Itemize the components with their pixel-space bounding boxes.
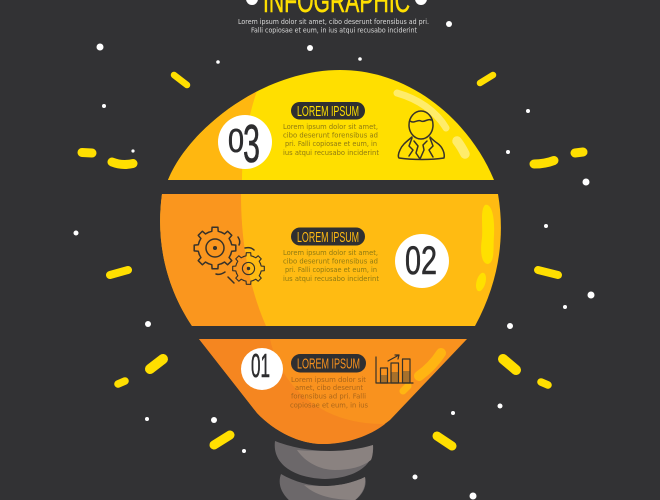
subtitle text	[238, 18, 429, 34]
subtitle text: Lorem ipsum dolor sit amet, cibo deserunt forensibus ad pri.	[238, 18, 429, 26]
text block 03	[283, 123, 379, 157]
title	[246, 0, 427, 19]
text block 03: pri. Falli copiosae et eum, in	[285, 140, 377, 148]
text block 02: pri. Falli copiosae et eum, in	[285, 266, 377, 274]
text block 02: ius atqui recusabo inciderint	[283, 275, 379, 283]
number 01 badge: 01	[251, 347, 270, 384]
icon: gears	[194, 227, 264, 284]
highlights	[474, 205, 494, 292]
number 02 badge: 02	[405, 239, 437, 283]
text block 03: cibo deserunt forensibus ad	[283, 132, 378, 140]
heading pill 02: LOREM IPSUM	[297, 229, 359, 246]
lamp socket	[275, 441, 373, 500]
panel: step 01	[199, 339, 467, 444]
highlights	[397, 93, 465, 154]
background dots	[74, 21, 594, 500]
text block 01: copiosae et eum, in ius	[290, 402, 368, 410]
heading pill 02	[291, 228, 365, 246]
icon: bar chart	[376, 355, 413, 383]
subtitle text: Falli copiosae et eum, in ius atqui recusabo inciderint	[251, 26, 417, 34]
number 03 badge: 0	[228, 122, 244, 159]
number 03 badge	[218, 114, 272, 174]
socket band 2	[280, 474, 366, 500]
text block 03: Lorem ipsum dolor sit amet,	[283, 123, 378, 131]
heading pill 03: LOREM IPSUM	[297, 103, 359, 120]
heading pill 03	[291, 102, 365, 120]
icon: businessman	[398, 111, 444, 160]
socket band 1	[275, 441, 373, 479]
panel: step 02	[160, 194, 501, 326]
text block 01: Lorem ipsum dolor sit	[291, 376, 366, 384]
text block 03: ius atqui recusabo inciderint	[283, 149, 379, 157]
text block 02: Lorem ipsum dolor sit amet,	[283, 249, 378, 257]
text block 02: cibo deserunt forensibus ad	[283, 258, 378, 266]
text block 01: amet, cibo deserunt	[295, 384, 363, 392]
panel: step 03	[160, 70, 494, 180]
highlights	[403, 353, 441, 391]
number 03 badge: 3	[243, 114, 260, 174]
number 02 badge	[395, 234, 449, 288]
light rays	[82, 75, 583, 446]
text block 01	[290, 376, 368, 410]
heading pill 01: LOREM IPSUM	[297, 356, 360, 372]
text block 01: forensibus ad pri. Falli	[291, 392, 366, 400]
number 01 badge	[241, 347, 283, 390]
text block 02	[283, 249, 379, 283]
heading pill 01	[291, 354, 366, 372]
